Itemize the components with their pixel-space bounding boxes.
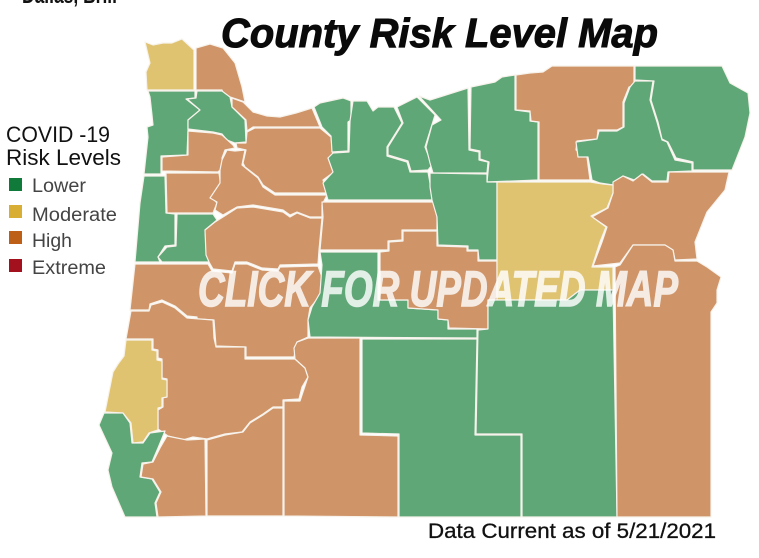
county: Wheeler (430, 173, 497, 260)
county: Yamhill (162, 131, 235, 172)
legend heading: COVID -19 (6, 122, 110, 147)
county: Morrow (470, 75, 538, 182)
legend item: Extreme: Extreme (32, 258, 106, 279)
county: Marion (210, 150, 327, 217)
county: Washington (187, 91, 246, 143)
county: Lake (362, 339, 521, 517)
county: Benton (158, 214, 217, 262)
title: County Risk Level Map (221, 10, 658, 56)
county: Gilliam (419, 88, 488, 173)
county: Lane (130, 264, 323, 357)
data date note: Data Current as of 5/21/2021 (428, 520, 716, 543)
county: Tillamook (144, 91, 200, 174)
county: Linn (205, 207, 322, 271)
county: Sherman (388, 97, 435, 171)
county: Harney (476, 290, 617, 517)
county: Jefferson (320, 202, 437, 250)
legend item: Lower: Lower (32, 176, 87, 197)
county: Grant (497, 182, 613, 300)
county: Douglas (126, 302, 308, 440)
county: Columbia (196, 44, 245, 102)
legend heading: Risk Levels (6, 145, 121, 170)
county: Malheur (615, 245, 721, 517)
legend item: Moderate: Moderate (32, 205, 117, 226)
county: Jackson (207, 408, 283, 516)
county: Union (576, 81, 692, 185)
legend item: High: High (32, 231, 72, 252)
county map of Oregon (99, 39, 750, 517)
county: Wallowa (635, 66, 750, 170)
legend item: Lower (9, 176, 87, 197)
county: Curry (99, 413, 165, 517)
county: Clackamas (236, 128, 334, 193)
county: Josephine (141, 436, 206, 517)
county: Wasco (323, 101, 437, 200)
county: Umatilla (516, 66, 634, 180)
county: Clatsop (145, 39, 194, 90)
county: Multnomah (232, 98, 320, 131)
county: Polk (166, 173, 221, 213)
legend (6, 122, 121, 279)
county: Coos (105, 340, 167, 443)
county: Lincoln (135, 176, 175, 262)
county: Crook (380, 231, 497, 329)
legend item: High (9, 231, 72, 252)
county: Baker (592, 172, 729, 266)
county: Hood River (314, 98, 351, 152)
county: Klamath (284, 338, 398, 517)
county: Deschutes (308, 252, 477, 338)
